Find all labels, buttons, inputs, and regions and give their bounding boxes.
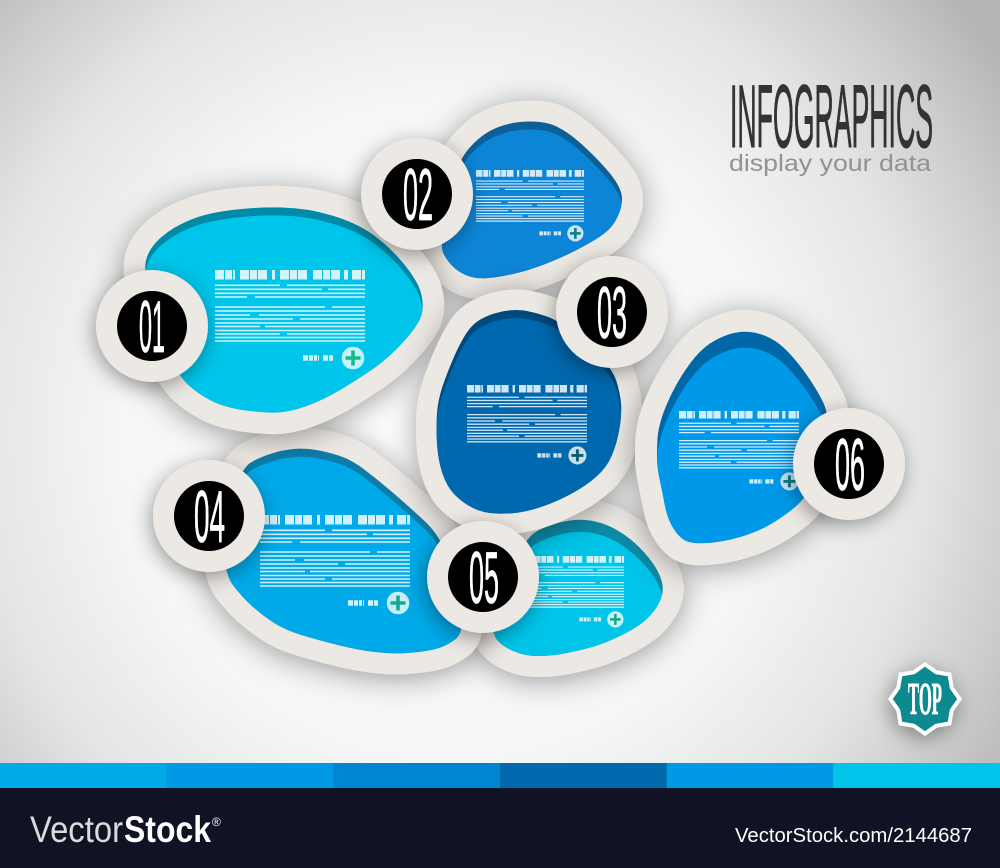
icon: TOP badge: TOP (908, 674, 942, 724)
number badge 05: 05 (469, 538, 499, 619)
number badge 06 (793, 408, 905, 520)
number badge 04: 04 (194, 477, 225, 558)
footer logo: Vector (30, 809, 123, 850)
footer logo: ® (212, 815, 221, 829)
footer logo (30, 809, 221, 850)
icon: TOP badge (888, 662, 962, 736)
number badge 03 (556, 256, 668, 368)
footer logo: Stock (124, 809, 211, 850)
number badge 02: 02 (403, 155, 433, 236)
number badge 05 (427, 521, 539, 633)
panel: bubble 06 (657, 332, 829, 559)
panel: bubble 03 (436, 310, 621, 522)
number badge 06: 06 (835, 425, 865, 506)
colour stripe (0, 763, 1000, 788)
number badge 03: 03 (597, 273, 627, 354)
number badge 01 (96, 270, 208, 382)
number badge 02 (361, 138, 473, 250)
panel: bubble 04 (223, 449, 462, 661)
number badge 04 (153, 460, 265, 572)
panel: bubble 02 (442, 122, 622, 286)
number badge 01: 01 (139, 287, 165, 368)
subtitle: display your data (729, 150, 931, 176)
footer bar (0, 788, 1000, 868)
panel: bubble 05 (491, 520, 663, 668)
panel: bubble 01 (145, 207, 423, 421)
footer id: VectorStock.com/2144687 (735, 825, 972, 847)
title (729, 66, 933, 176)
